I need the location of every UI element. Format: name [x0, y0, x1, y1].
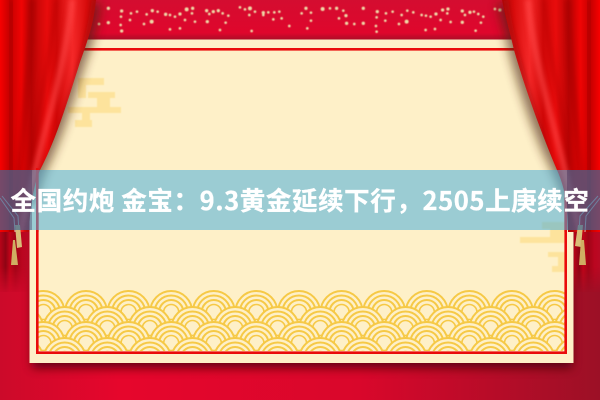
left curtain shadow — [5, 3, 101, 203]
left lower drape — [0, 232, 27, 292]
translucent title band — [0, 170, 600, 230]
right lower drape — [574, 232, 600, 289]
right curtain — [500, 0, 600, 234]
right cloud ornament — [520, 222, 565, 272]
left curtain — [0, 0, 100, 234]
top red band — [0, 0, 600, 41]
title: 全国约炮 金宝：9.3黄金延续下行，2505上庚续空 — [11, 181, 589, 218]
cream panel — [30, 40, 574, 363]
right tassel — [575, 196, 600, 265]
left band shading over curtain — [0, 170, 32, 230]
frame segments over curtains — [36, 168, 567, 232]
gold confetti dots — [98, 6, 502, 33]
panel shadow — [32, 46, 572, 368]
right band shading over curtain — [567, 170, 600, 230]
red inner frame — [37, 49, 566, 353]
wave scale pattern — [38, 290, 564, 351]
left cloud ornament — [68, 78, 121, 127]
right curtain shadow — [497, 3, 595, 203]
left tassel — [0, 196, 22, 265]
